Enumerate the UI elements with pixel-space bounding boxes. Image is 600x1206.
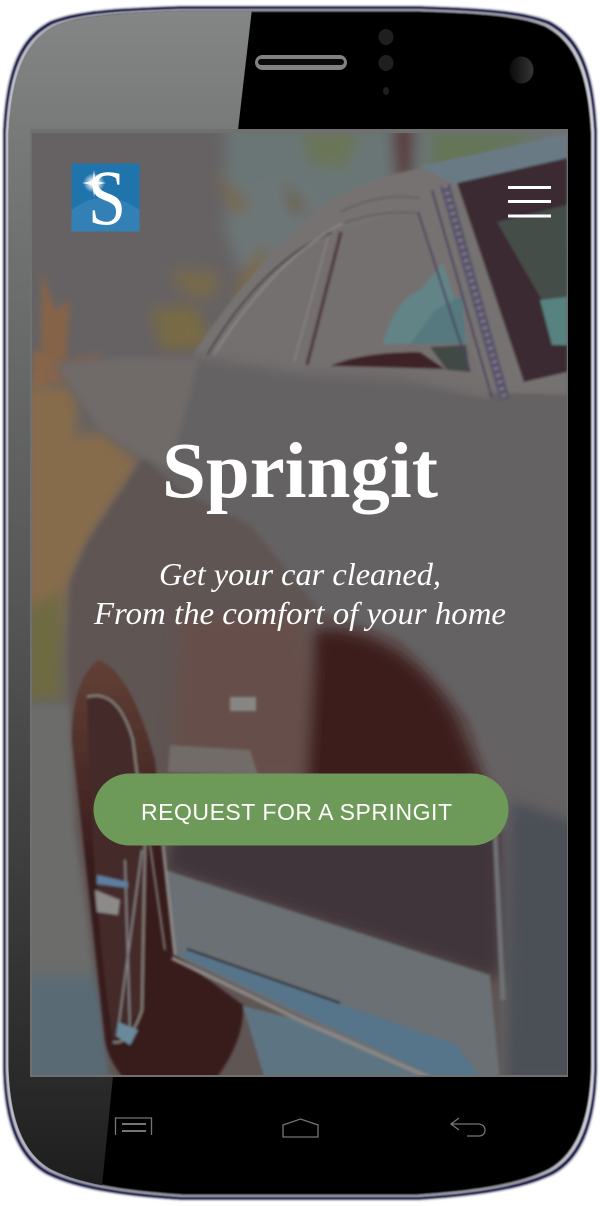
tagline: Get your car cleaned, bbox=[159, 556, 441, 592]
lower door panel bbox=[150, 845, 500, 1080]
orange foliage beside car bbox=[32, 384, 138, 704]
call to action button: REQUEST FOR A SPRINGIT bbox=[141, 799, 452, 825]
logo: S bbox=[88, 154, 126, 241]
title: Springit bbox=[162, 428, 438, 515]
smoke plume bbox=[58, 354, 464, 462]
logo bbox=[72, 154, 140, 241]
hamburger menu bbox=[508, 186, 551, 218]
call to action button bbox=[94, 774, 508, 846]
wheel arch and tyre bbox=[72, 660, 243, 1080]
screen frame bbox=[30, 129, 568, 1077]
glass glare bbox=[0, 0, 253, 1206]
front camera bbox=[510, 56, 534, 84]
road bbox=[32, 705, 90, 970]
sensors bbox=[378, 29, 394, 95]
icon: home key bbox=[283, 1119, 318, 1137]
speaker grille bbox=[255, 55, 347, 70]
background trees bbox=[150, 125, 575, 355]
screen photo: car wash bbox=[24, 125, 600, 1085]
car body bbox=[68, 458, 500, 1080]
icon: back key bbox=[451, 1118, 485, 1136]
tagline bbox=[93, 556, 506, 631]
body highlights bbox=[168, 697, 503, 1000]
icon: menu key bbox=[116, 1118, 152, 1135]
tagline: From the comfort of your home bbox=[93, 595, 506, 631]
roof and windows bbox=[193, 135, 567, 400]
